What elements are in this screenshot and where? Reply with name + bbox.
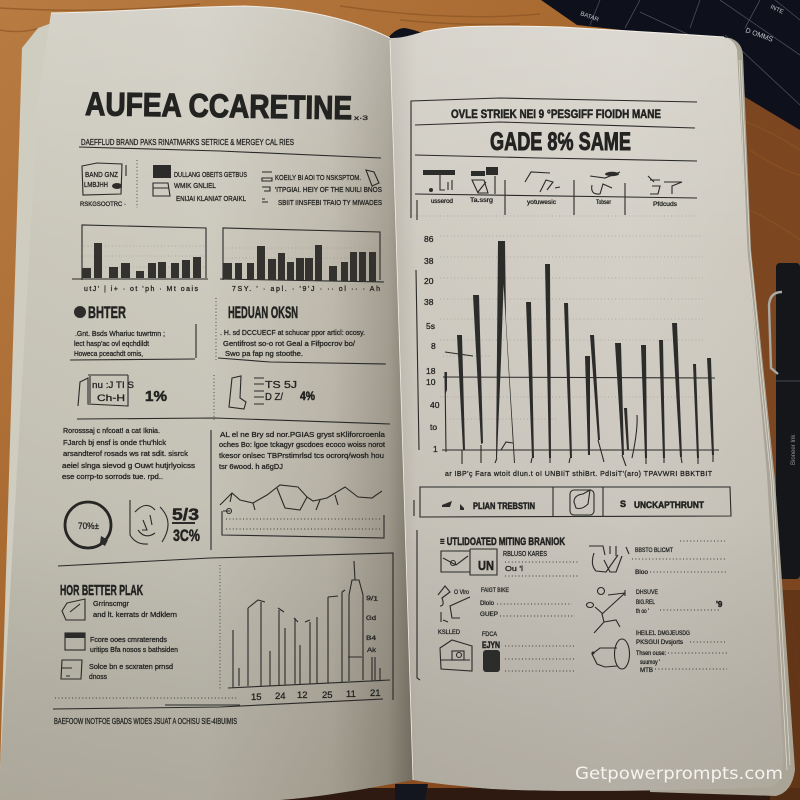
- icon row: yotuwesic: [527, 200, 556, 206]
- icon: sketch label box: RSKGSOOTRC ·: [80, 201, 126, 208]
- text block: health: [216, 298, 386, 364]
- black pen: Bioneer Ink: [791, 434, 797, 465]
- plan list: Fcore ooes cmraterends: [90, 635, 167, 644]
- paragraph left: FJarch bj ensf is onde t'hu'hlck: [63, 438, 166, 447]
- left page content: [53, 85, 393, 726]
- paragraph right: tkesor onlsec TBPrstimrlsd tcs ocrorq/wosh hou: [219, 451, 384, 460]
- stat numbers: 5/3: [172, 505, 199, 524]
- black pen: [769, 263, 800, 579]
- stat numbers: 3C%: [173, 526, 200, 545]
- y axis labels: 86: [424, 234, 434, 244]
- text block: better: .Gnt. Bsds Whariuc tuwrtmn ;: [75, 329, 165, 338]
- bar chart right: 7SY. ' · apl. · '9'J · ·· ol ·· · Ah: [232, 286, 380, 293]
- y axis labels: 8: [431, 341, 436, 351]
- icon row: Tobser: [596, 200, 611, 206]
- gauge ring: [65, 502, 111, 548]
- icon: sketch label box: [80, 163, 126, 208]
- benefit list: ENIJAI KLANIAT ORAIKL: [176, 194, 246, 203]
- feature list: SBIIT IINSFEBI TFAIO TY MIWADES: [278, 198, 382, 207]
- header strip: OVLE STRIEK NEI 9 °PESGIFF FIOIDH MANE: [451, 109, 661, 121]
- feature list: KOEILY BI AOI TO NSKSPTOM.: [275, 173, 361, 182]
- plan list: dnoss: [89, 672, 107, 681]
- text block: better: lect hasp'ac ovl eqchdildt: [74, 339, 150, 348]
- item: hand sketch: BBSTO BLICMT: [635, 547, 673, 554]
- right page content: [411, 98, 731, 680]
- paragraph left: ese corrp-to sorrods tue. rpd..: [62, 472, 163, 481]
- footer rules: [53, 698, 383, 709]
- icon stat: list: 4%: [300, 389, 315, 403]
- y axis labels: 1: [433, 444, 438, 454]
- item: tool icon: KSLLED: [438, 629, 460, 636]
- divider rule: [58, 553, 393, 700]
- icon stat: box: nu :J TI S: [92, 380, 134, 390]
- icon stat: box: 1%: [145, 388, 167, 405]
- item: shell sketch: IHEILE1. DMGJEUSDG: [636, 630, 690, 637]
- item: camera icon: [440, 631, 575, 672]
- item: camera icon: EJYN: [482, 640, 500, 650]
- text block: health: Swo pa fap ng stoothe.: [225, 349, 303, 358]
- item: tool icon: FAIGT BIKE: [481, 587, 510, 594]
- plan / update banner: [414, 487, 731, 517]
- icon: swirl: [130, 500, 168, 544]
- spike chart: [220, 561, 390, 703]
- icon stat: box: Ch-H: [97, 393, 125, 403]
- spike chart: 11: [346, 689, 356, 700]
- bar chart right: [220, 228, 384, 293]
- title: AUFEA CCARETINE: [85, 85, 352, 126]
- paragraph left: arsandterof rosads ws rat sdit. sisrck: [63, 449, 188, 458]
- right page sheet: [390, 26, 783, 791]
- dark keyboard in the corner: [541, 0, 800, 130]
- plan list: [61, 599, 178, 681]
- paragraph right: tsr 6wood. h a6gDJ: [219, 462, 283, 471]
- section: updated writing breakdown: ≡ UTLIDOATED MITING BRANIOK: [440, 536, 565, 548]
- item: figure sketch: [586, 588, 723, 633]
- y axis labels: 20: [424, 276, 434, 286]
- text block: better: [70, 324, 196, 360]
- paragraph right: oches Bo: lgoe tckagyr gscdoes ecoco woiss norot: [219, 440, 386, 449]
- spike chart: 21: [370, 688, 381, 699]
- heading: better: [74, 303, 126, 322]
- gauge ring: 70%±: [78, 521, 99, 531]
- item: figure sketch: BlG.REL: [636, 599, 655, 606]
- section: updated writing breakdown: [417, 530, 727, 680]
- bar chart left: [72, 225, 208, 293]
- paragraph left: [62, 426, 195, 481]
- dark keyboard in the corner: BATAR: [579, 11, 600, 24]
- y axis labels: 18: [426, 366, 436, 376]
- subtitle: DAEFFLUD BRAND PAKS RINATMARKS SETRICE & MERGEY CAL RIES: [81, 137, 294, 147]
- y axis labels: 5s: [426, 321, 435, 331]
- spike chart: 24: [275, 691, 286, 702]
- text block: health: Gentifrost so-o rot Geal a Fifpocrov bo/: [223, 339, 356, 348]
- spike chart: Ak: [367, 647, 377, 654]
- text block: health: . H. sd DCCUECF at schucar ppor articl: ocosy.: [220, 328, 365, 337]
- item: figure sketch: th oo ': [636, 608, 649, 615]
- plan / update banner: S: [620, 499, 626, 509]
- y axis labels: 40: [430, 400, 440, 410]
- icon: sketch label box: BAND GNZ: [85, 170, 118, 179]
- item: hand sketch: [589, 541, 727, 576]
- plan / update banner: PLIAN TREBSTIN: [473, 501, 535, 512]
- dark keyboard in the corner: D OMMS: [744, 27, 774, 44]
- bookmark ribbon: [388, 28, 428, 800]
- benefit list: DULLANG OBEITS GETBUS: [174, 170, 247, 179]
- heading: better plan: HOR BETTER PLAK: [60, 582, 143, 599]
- icon stat: list: TS 5J: [265, 380, 297, 391]
- x axis labels: ar IBP'ç Fara wtoit dIun.t oI UNBIiT sthiBrt. PdIsiT'(aro) TPAVWRI BBKTBIT: [445, 471, 713, 478]
- item: figure sketch: '9: [716, 600, 723, 609]
- plan / update banner: UNCKAPTHRUNT: [634, 500, 704, 511]
- plan list: Solce bn e scxraten prnsd: [89, 662, 173, 671]
- dark keyboard in the corner: INTE: [769, 4, 784, 16]
- item: figure sketch: DHSUVE: [636, 589, 659, 596]
- item: map icon: [441, 549, 578, 576]
- icon row: usserod: [431, 199, 453, 205]
- y axis labels: to: [430, 422, 437, 432]
- spike chart: 25: [322, 690, 333, 701]
- item: camera icon: FDCA: [482, 631, 498, 638]
- main tall bar chart: [416, 234, 719, 478]
- page title: GADE 8℅ SAME: [490, 128, 631, 156]
- stat numbers: [172, 505, 200, 545]
- item: tool icon: [438, 586, 575, 636]
- icon stat: list: D Z/: [265, 392, 283, 403]
- top frame rules: [411, 98, 697, 218]
- subtitle: [79, 137, 381, 158]
- plan list: uritips Bfa nosos s bathsiden: [90, 645, 178, 654]
- heading: better: BHTER: [88, 303, 126, 322]
- icon stat: list: [77, 375, 390, 424]
- item: shell sketch: PKSGUI Dvsjorts: [636, 639, 684, 646]
- icon row: Ta.ssrg: [470, 198, 493, 204]
- icon: sketch label box: LMBJHH: [84, 182, 108, 189]
- item: tool icon: O Vlro: [454, 589, 469, 596]
- spike chart: 15: [251, 692, 262, 703]
- plan list: Grrinscmgr: [93, 599, 129, 608]
- spike chart: B4: [366, 635, 376, 642]
- icon row: [412, 167, 697, 220]
- left page sheet: [0, 6, 413, 800]
- icon row: Pfdcuds: [653, 202, 677, 208]
- paragraph left: aeiel slnga sievod g Ouwt hutjrlyoicss: [62, 461, 195, 470]
- item: tool icon: Dlolo: [480, 600, 494, 607]
- text block: better: Howeca pceachdt ornis,: [74, 349, 143, 358]
- paragraph right: [211, 430, 386, 550]
- bar chart left: utJ' | i+ · ot 'ph · Mt oais: [84, 286, 198, 293]
- spike chart: 12: [297, 690, 308, 701]
- icon stat: box: [78, 375, 167, 406]
- title: x·3: [354, 116, 369, 122]
- item: map icon: Ou 'l: [505, 566, 524, 573]
- spike chart: Gd: [366, 615, 376, 622]
- watermark: Getpowerprompts.com: [575, 764, 783, 784]
- item: map icon: RBLUSO KARES: [503, 551, 547, 558]
- item: shell sketch: Thsen ouse:: [636, 650, 666, 657]
- spike chart: 9/1: [366, 595, 379, 603]
- item: shell sketch: MTB: [640, 667, 653, 674]
- item: shell sketch: [592, 630, 727, 674]
- footer note: BAEFOOW INOTFOE GBADS WIDES JSUAT A OCHISU SIE-4IBUIMIS: [54, 717, 237, 726]
- paragraph left: Rorosssaj c nfcoat! a cat Iknia.: [63, 426, 160, 435]
- benefit list: [137, 160, 247, 208]
- y axis labels: 38: [424, 256, 434, 266]
- heading: health: HEDUAN OKSN: [228, 303, 298, 322]
- plan list: and lt. kerrats dr Mdklern: [93, 610, 177, 619]
- y axis labels: [424, 234, 440, 454]
- item: map icon: UN: [478, 558, 494, 573]
- y axis labels: 38: [424, 297, 434, 307]
- item: hand sketch: Bloo: [635, 569, 648, 576]
- benefit list: WMIK GNLIEL: [174, 181, 216, 190]
- feature list: [262, 170, 382, 207]
- item: shell sketch: suumoy ': [640, 660, 660, 666]
- line chart: [220, 485, 384, 538]
- y axis labels: 10: [426, 377, 436, 387]
- item: tool icon: GUEP: [480, 611, 498, 618]
- paragraph right: AL el ne Bry sd nor.PGIAS gryst sKliforcroenla: [220, 430, 386, 439]
- feature list: 'ITPGIAI. HEIY OF THE NUILI BNOS: [275, 185, 382, 194]
